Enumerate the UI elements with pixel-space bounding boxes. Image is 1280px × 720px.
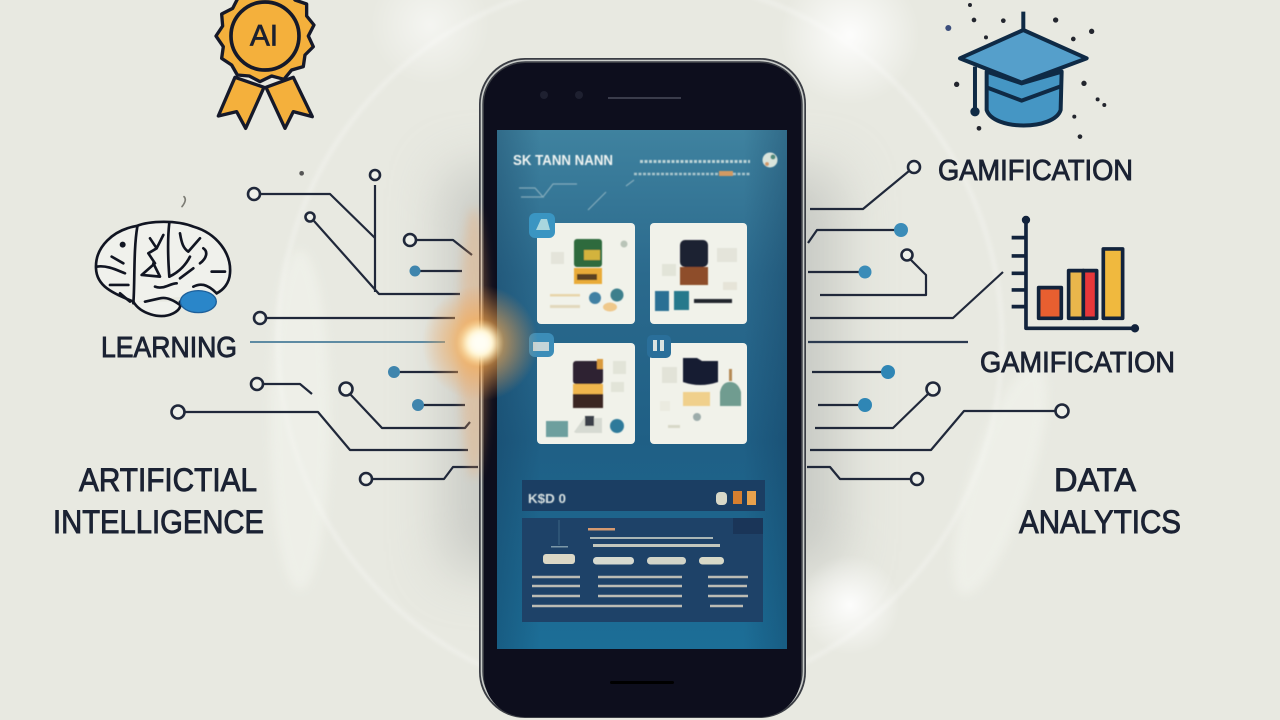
label: artificial intelligence [53, 462, 264, 540]
bottom data table [522, 518, 763, 622]
app header [513, 152, 778, 210]
speaker and camera [540, 91, 681, 99]
label: learning: LEARNING [101, 332, 237, 364]
icon: bar chart [1012, 218, 1137, 331]
home indicator [610, 681, 674, 684]
badge icons [529, 213, 671, 358]
phone [479, 58, 806, 718]
card 4 [650, 343, 747, 444]
right circuit lines [807, 161, 1068, 485]
label: gamification lower: GAMIFICATION [980, 347, 1175, 379]
label: data analytics: ANALYTICS [1019, 504, 1181, 540]
icon: graduation cap [945, 3, 1106, 139]
label: artificial intelligence: ARTIFICTIAL [79, 462, 257, 498]
card 2 [650, 223, 747, 324]
icon: AI medal [216, 0, 314, 128]
lens flare [422, 208, 538, 478]
screen [497, 130, 787, 649]
app header: SK TANN NANN [513, 153, 613, 169]
icon: AI medal: AI [250, 20, 278, 53]
icon: brain [96, 171, 304, 316]
label: data analytics [1019, 462, 1181, 540]
bottom status bar: K$D 0 [528, 491, 566, 506]
card 1 [537, 223, 635, 324]
phone body [479, 58, 806, 718]
label: gamification top: GAMIFICATION [938, 155, 1133, 187]
card 3 [537, 343, 635, 444]
bottom status bar [522, 480, 765, 511]
label: data analytics: DATA [1054, 462, 1137, 498]
left circuit lines [172, 170, 478, 485]
label: artificial intelligence: INTELLIGENCE [53, 504, 264, 540]
